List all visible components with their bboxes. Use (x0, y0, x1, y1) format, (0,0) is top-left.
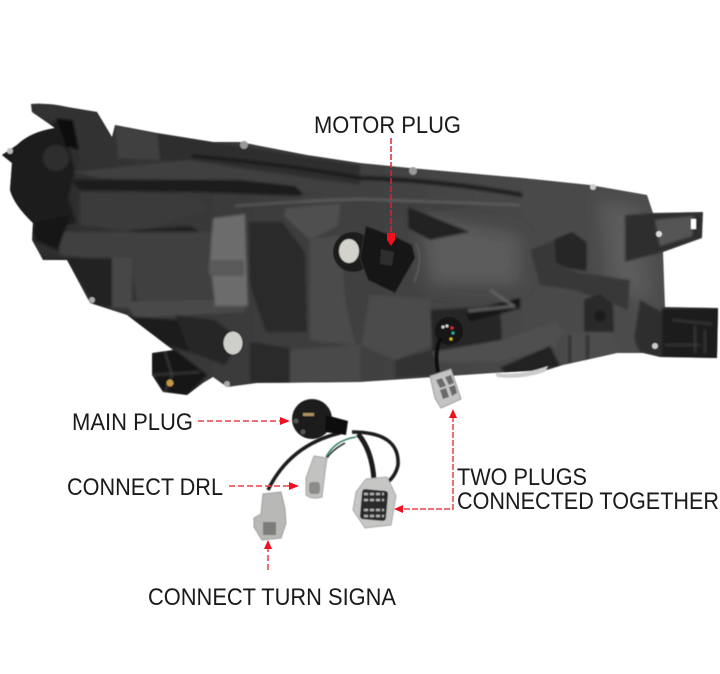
dark left lobe (0, 120, 76, 235)
central lighter glow (420, 215, 520, 285)
arrow: connect DRL (229, 482, 299, 490)
top-left panel (116, 126, 160, 159)
hanging two-pin connector (430, 369, 461, 408)
arrow: connect turn signal (264, 540, 272, 570)
motor plug (360, 226, 415, 293)
headlight housing (0, 100, 720, 400)
motor dome (43, 145, 69, 171)
main plug (292, 399, 348, 439)
arrow: main plug (198, 417, 290, 425)
arrow: two plugs (394, 409, 457, 513)
right lower socket (585, 295, 613, 332)
right lower bracket (662, 308, 720, 360)
socket with fins (333, 232, 373, 272)
label: motor plug: MOTOR PLUG (314, 112, 461, 139)
lower-centre dark box (430, 306, 502, 352)
white bulb upper (339, 239, 359, 263)
large connector (353, 477, 396, 528)
top handle bracket (30, 103, 105, 148)
left lower panels (290, 345, 360, 384)
white bulb lower (223, 331, 243, 355)
middle left panels (82, 192, 150, 230)
arrow: motor plug (387, 138, 395, 246)
label: main plug: MAIN PLUG (72, 409, 193, 436)
label: connect DRL: CONNECT DRL (67, 474, 223, 501)
bottom left bracket base (176, 316, 231, 365)
pale lens edge (495, 366, 548, 378)
turn signal connector (254, 492, 286, 540)
lower ribs (566, 331, 612, 364)
DRL connector (306, 456, 327, 498)
below panels, dark strip (130, 316, 190, 352)
right upper bracket (625, 212, 703, 262)
label: two plugs connected together: TWO PLUGS (457, 464, 587, 491)
dark cover base and grey tab panel (210, 214, 248, 306)
wiring harness (254, 399, 398, 540)
lower socket wires (435, 317, 463, 345)
label: two plugs connected together (457, 464, 719, 515)
right upper socket (555, 233, 586, 270)
housing base (0, 100, 720, 400)
harness wires (268, 433, 340, 490)
label: connect turn signal: CONNECT TURN SIGNA (148, 584, 396, 611)
mounting holes (7, 148, 13, 154)
top rib (192, 156, 522, 195)
upper rail and shadow (157, 133, 360, 185)
